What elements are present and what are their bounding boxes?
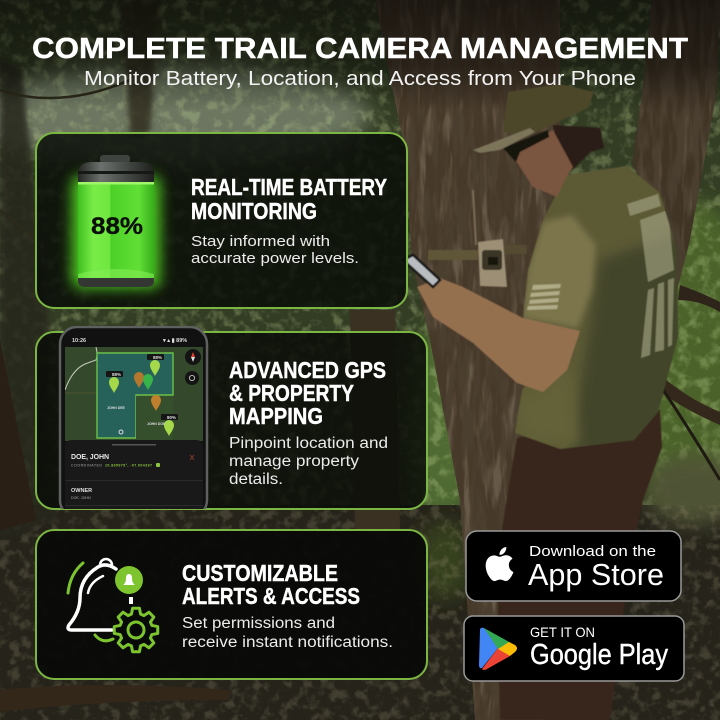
badge: App Store — [466, 531, 681, 601]
satellite map — [65, 347, 203, 441]
smartphone in hand — [403, 255, 440, 287]
icon: battery 88%: 88% — [91, 213, 143, 240]
description — [229, 435, 388, 488]
bottom sheet: OWNER — [71, 488, 92, 494]
heading: REAL-TIME BATTERY — [191, 174, 387, 200]
branches — [678, 285, 720, 312]
bottom sheet: DOE, JOHN — [71, 454, 109, 461]
heading: CUSTOMIZABLE — [182, 560, 338, 586]
description: Pinpoint location and — [229, 435, 388, 452]
heading — [182, 560, 360, 609]
battery chips on map: 88% — [112, 372, 121, 377]
bottom sheet: DOE, JOHN — [71, 496, 91, 500]
badge: Google Play: GET IT ON — [530, 624, 595, 640]
panel: customizable alerts and access — [36, 530, 427, 679]
badge: App Store: App Store — [528, 557, 664, 592]
hair — [553, 125, 604, 170]
icon: apple logo — [486, 547, 513, 581]
bottom sheet: COORDINATED — [71, 464, 102, 468]
tree trunks — [0, 60, 58, 540]
map pins — [109, 360, 174, 436]
subtitle: Monitor Battery, Location, and Access from Your Phone — [84, 68, 636, 90]
description: receive instant notifications. — [182, 634, 393, 651]
heading: ALERTS & ACCESS — [182, 583, 360, 609]
description: Set permissions and — [182, 615, 335, 632]
heading: ADVANCED GPS — [229, 357, 386, 383]
status bar: ▾ ▴ ▮ 89% — [162, 338, 187, 344]
description — [182, 615, 393, 651]
shirt — [515, 166, 678, 450]
heading: MAPPING — [229, 403, 323, 429]
description: manage property — [229, 453, 359, 470]
top dark fade — [0, 0, 720, 110]
description: accurate power levels. — [191, 250, 359, 267]
satellite map: JOHN DOE — [147, 422, 166, 426]
badge: Google Play: Google Play — [530, 639, 668, 671]
sleeve flag — [527, 284, 561, 310]
heading — [229, 357, 386, 429]
description — [191, 233, 359, 267]
shirt back print — [627, 194, 674, 358]
face — [510, 130, 573, 197]
status bar: 10:26 — [72, 338, 86, 344]
heading: & PROPERTY — [229, 380, 354, 406]
satellite map: JOHN DEE — [107, 406, 126, 410]
trail camera on tree — [428, 190, 527, 287]
bottom sheet — [65, 440, 203, 510]
description: Stay informed with — [191, 233, 330, 250]
arm and hand — [417, 278, 580, 392]
cap — [503, 84, 594, 138]
heading — [191, 174, 387, 224]
badge: App Store: Download on the — [529, 543, 656, 560]
pants — [497, 410, 662, 720]
heading: MONITORING — [191, 198, 317, 224]
title: COMPLETE TRAIL CAMERA MANAGEMENT — [32, 33, 688, 65]
phone mockup with map — [60, 327, 207, 517]
badge: Google Play — [464, 616, 684, 681]
panel: advanced GPS and property mapping — [36, 327, 427, 517]
panel: real-time battery monitoring — [36, 133, 407, 308]
battery chips on map: 88% — [153, 355, 162, 360]
photo subject: man with phone at trail camera — [403, 84, 690, 720]
battery chips on map — [106, 354, 178, 420]
bottom sheet: 10.865979°, -07.004397 — [105, 464, 152, 468]
status bar — [72, 338, 187, 343]
battery chips on map: 80% — [167, 415, 176, 420]
icon: Google Play logo — [479, 628, 517, 670]
sunglasses — [503, 130, 549, 162]
description: details. — [229, 471, 283, 488]
icon: bell and gear — [68, 559, 158, 652]
icon: battery 88% — [72, 155, 160, 288]
